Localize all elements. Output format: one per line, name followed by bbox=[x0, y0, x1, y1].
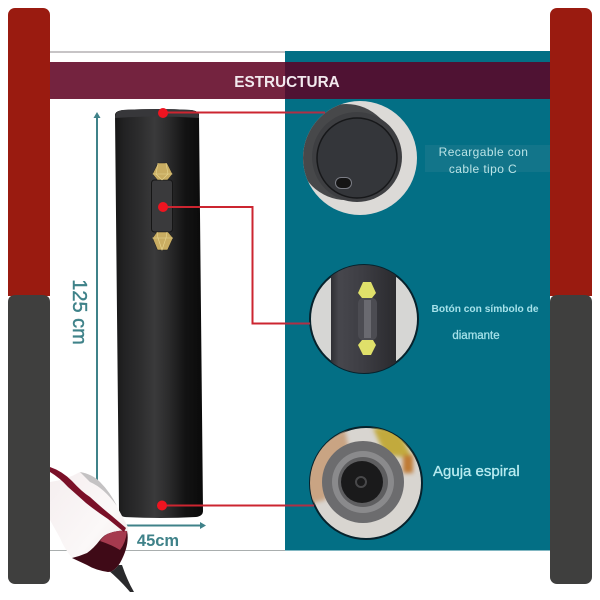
text: spiral needle: Aguja espiral bbox=[433, 463, 520, 480]
heading: estructura: ESTRUCTURA bbox=[234, 74, 340, 91]
circle: spiral needle opening bbox=[305, 427, 422, 539]
right side bar bbox=[550, 8, 592, 584]
wine glass illustration bbox=[50, 467, 134, 592]
glass stem bbox=[108, 565, 134, 592]
wine in bowl bbox=[72, 531, 128, 572]
text: diamond: diamante bbox=[452, 330, 500, 342]
width dimension arrow bbox=[125, 522, 206, 529]
glass rim shading bbox=[80, 472, 117, 506]
text: diamond button: Botón con símbolo de bbox=[432, 304, 539, 315]
text: rechargeable: Recargable con bbox=[439, 145, 528, 159]
panel: white left section outline bbox=[50, 52, 285, 550]
icon: yellow diamond bottom bbox=[358, 340, 376, 355]
circle: USB-C end cap bbox=[298, 101, 417, 215]
corkscrew device bbox=[115, 109, 203, 518]
height label: 125 cm bbox=[68, 279, 90, 345]
callout line: diamond button bbox=[158, 202, 310, 324]
label backdrop bbox=[425, 145, 550, 172]
left side bar bbox=[8, 8, 50, 584]
icon: yellow diamond top bbox=[358, 282, 376, 298]
panel: teal right section bbox=[285, 51, 550, 550]
icon: bottom gold diamond bbox=[152, 232, 173, 250]
title banner bbox=[50, 62, 550, 99]
callout line: end cap bbox=[158, 108, 325, 118]
text: cable type C: cable tipo C bbox=[449, 162, 517, 176]
width label: 45cm bbox=[137, 532, 179, 550]
USB-C port bbox=[336, 178, 352, 188]
icon: top gold diamond bbox=[152, 163, 172, 180]
callout line: spiral needle bbox=[157, 500, 314, 510]
circle: diamond button detail bbox=[310, 260, 418, 380]
wine stream bbox=[50, 467, 126, 532]
height dimension arrow bbox=[94, 112, 100, 490]
button strip bbox=[152, 180, 172, 232]
